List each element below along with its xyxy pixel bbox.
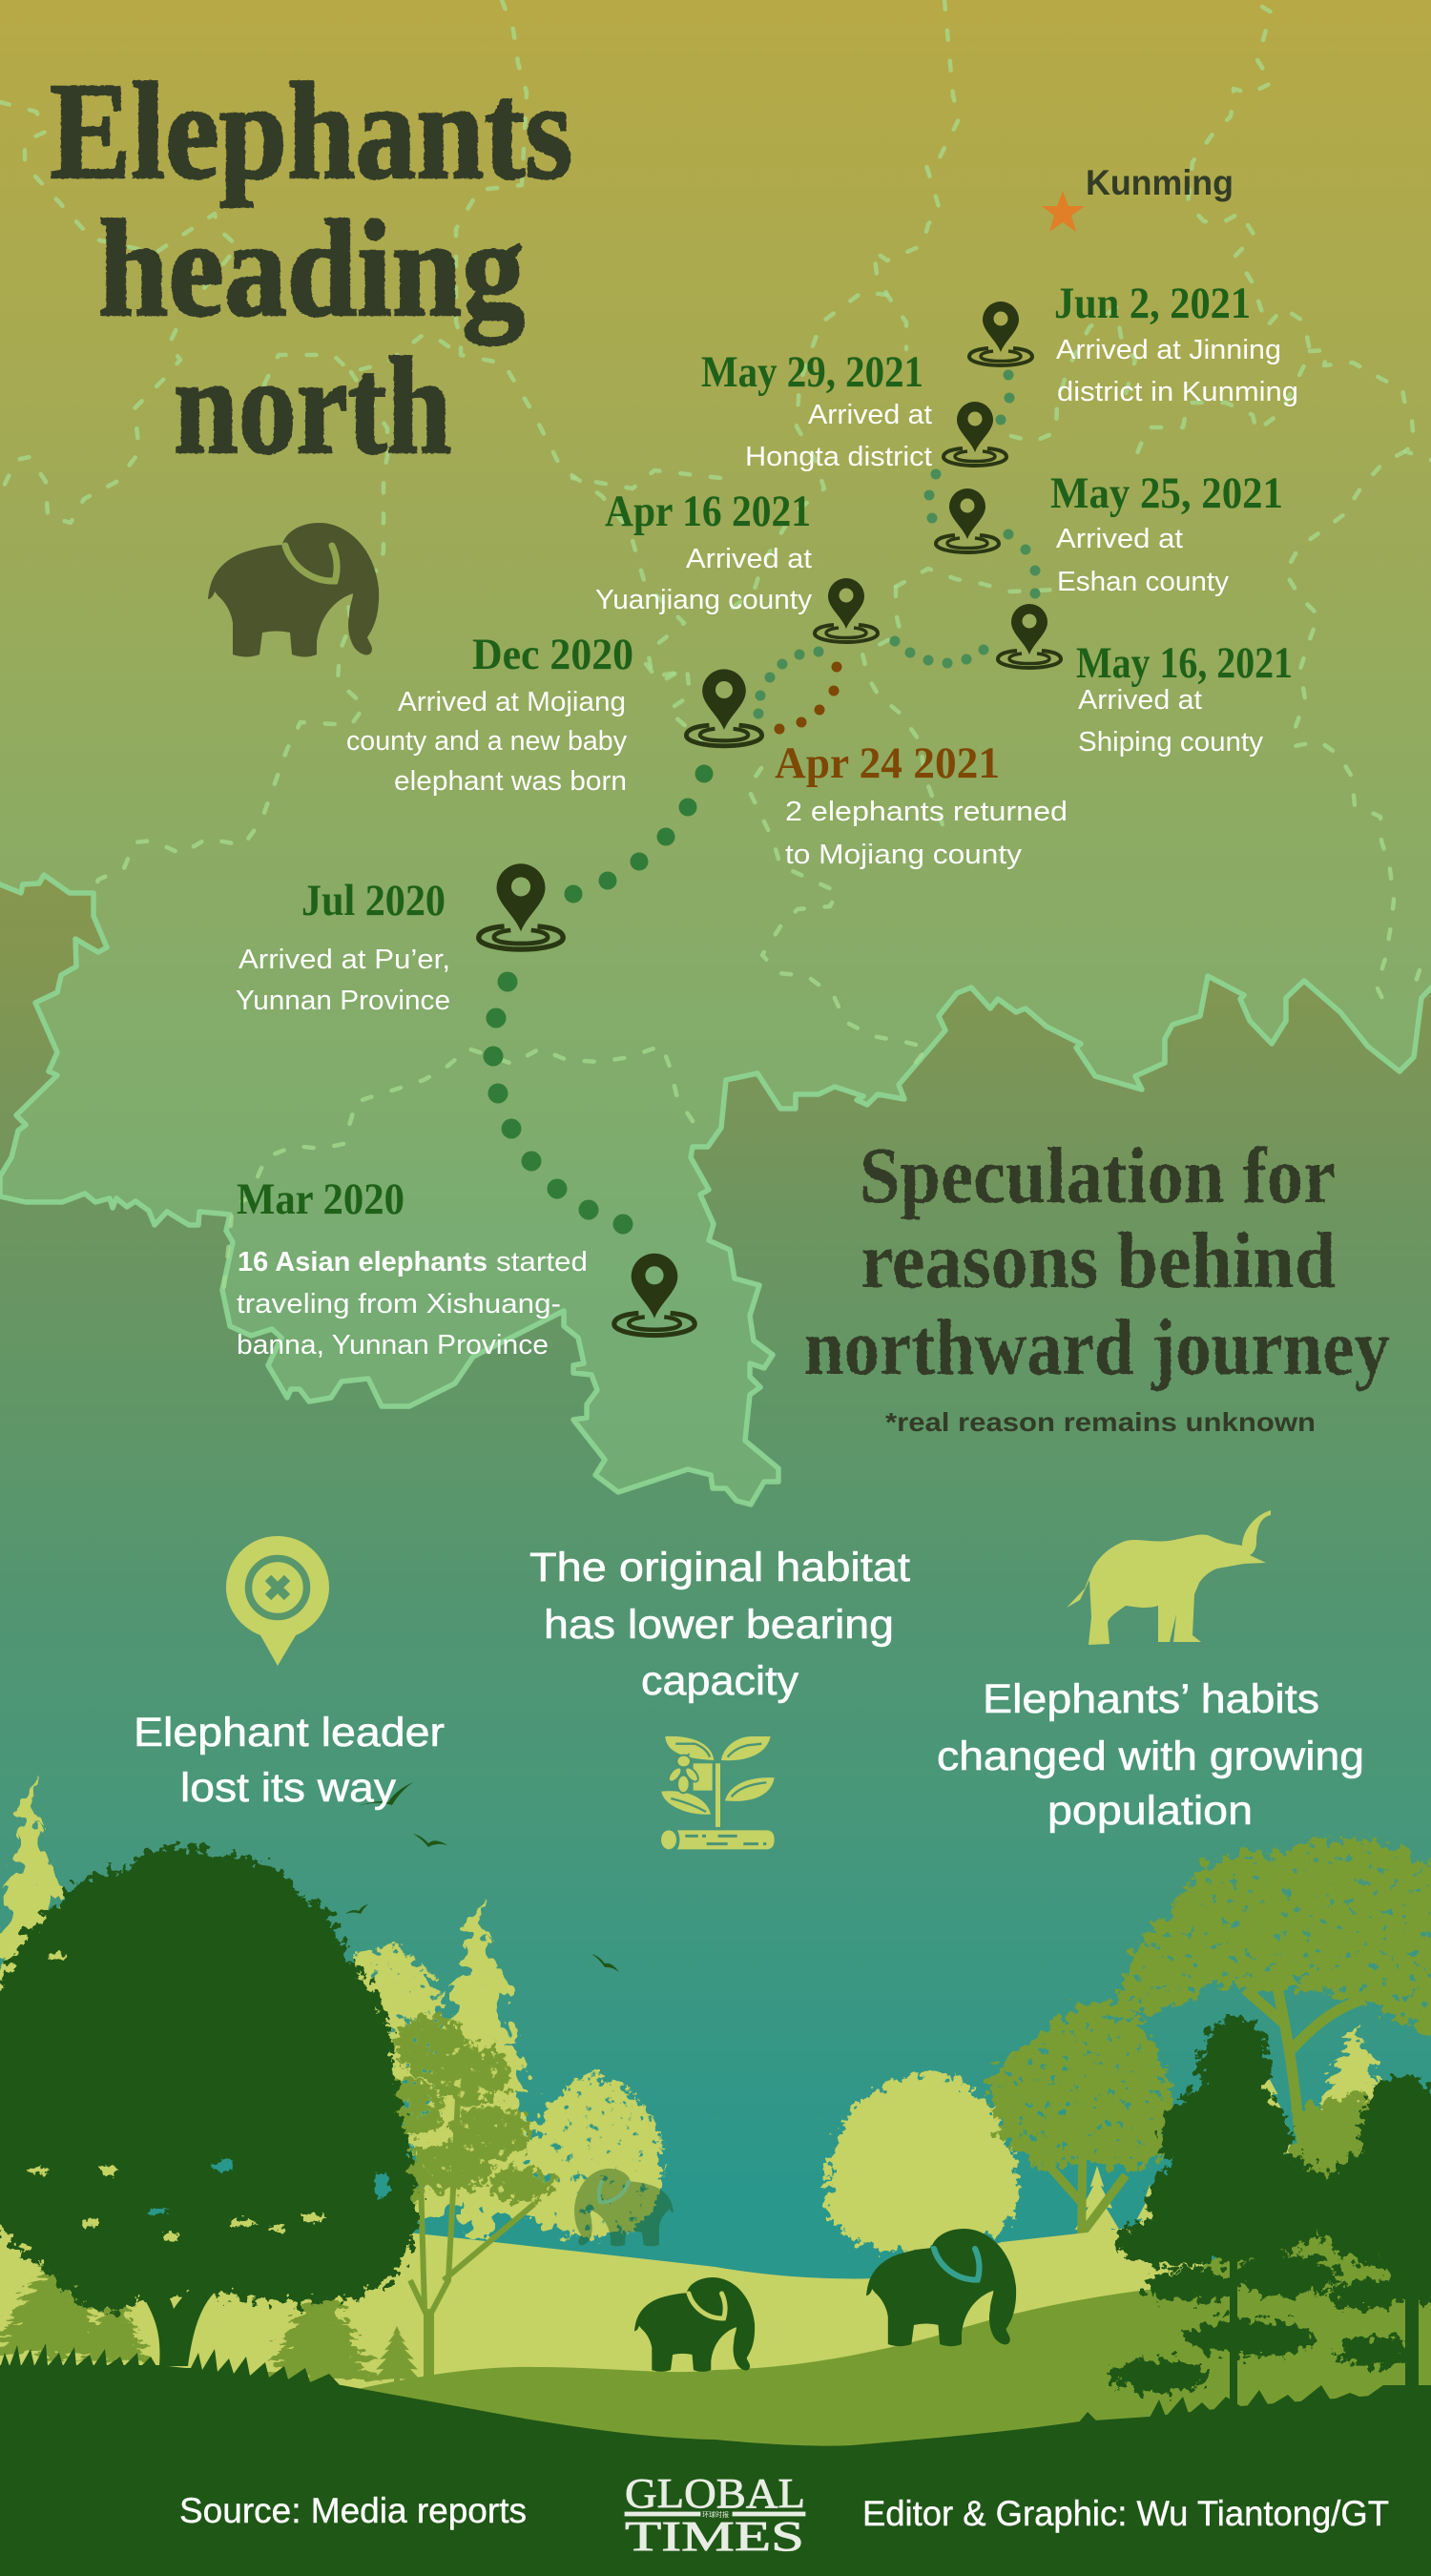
location pins <box>479 301 1061 1336</box>
note: real reason unknown: *real reason remains unknown <box>885 1407 1316 1437</box>
dark trees right <box>1111 2018 1431 2409</box>
title: Elephants <box>50 55 572 208</box>
reason 2: lower bearing capacity: capacity <box>641 1658 799 1704</box>
event: Apr 16 2021: Arrived at <box>686 544 812 574</box>
event: Apr 24 2021: Apr 24 2021 <box>775 738 1000 788</box>
pin: Eshan <box>936 488 999 552</box>
heading: speculation <box>804 1132 1390 1392</box>
pin: Jinning <box>969 301 1032 365</box>
medium hill <box>353 2156 1431 2481</box>
event: Mar 2020 <box>237 1174 588 1361</box>
acacia tree <box>1118 1839 1431 2132</box>
reason 3: habits changed: population <box>1047 1788 1253 1834</box>
elephant small foreground <box>634 2277 755 2372</box>
title <box>50 55 572 483</box>
event: May 16, 2021: Shiping county <box>1078 727 1264 758</box>
logo: Global Times: GLOBAL <box>625 2470 805 2517</box>
event: Jul 2020: Yunnan Province <box>236 986 450 1016</box>
event: Apr 24 2021 <box>775 738 1068 870</box>
light conifer middle <box>396 1897 558 2240</box>
large dots Dec 2020 to Jul 2020 <box>565 765 714 903</box>
olive bushes left <box>0 2256 421 2387</box>
light hill <box>0 2204 1240 2481</box>
logo: Global Times: 环球时报 <box>702 2510 729 2520</box>
event: May 29, 2021: May 29, 2021 <box>701 347 923 397</box>
event: Mar 2020: Mar 2020 <box>237 1174 404 1224</box>
icon: orange star <box>1042 191 1085 232</box>
olive tree centre <box>386 2014 555 2378</box>
event: May 25, 2021: Eshan county <box>1057 567 1230 597</box>
reason 2: lower bearing capacity: has lower bearing <box>544 1602 894 1648</box>
light conifer left <box>0 1773 106 2212</box>
event: Apr 16 2021: Apr 16 2021 <box>605 487 811 536</box>
reason 3: habits changed <box>937 1510 1364 1834</box>
reason 3: habits changed: changed with growing <box>937 1734 1364 1779</box>
map region with Yunnan boundary <box>0 0 1431 1505</box>
pin: Mojiang <box>686 669 762 746</box>
route dots <box>483 370 1040 1235</box>
event: May 29, 2021: Arrived at <box>808 400 932 430</box>
pin: Shiping <box>998 604 1061 668</box>
reason 3: habits changed: Elephants’ habits <box>983 1676 1319 1722</box>
event: May 25, 2021 <box>1050 468 1283 597</box>
grass left <box>0 2343 342 2387</box>
small light conifers <box>1009 2024 1411 2323</box>
light gaps in big tree <box>27 1952 326 2242</box>
dark tree two <box>1314 2075 1431 2395</box>
round light tree right <box>827 2075 1018 2252</box>
event: Jun 2, 2021: Arrived at Jinning <box>1056 335 1281 365</box>
footer credit: Editor & Graphic: Wu Tiantong/GT <box>862 2494 1389 2533</box>
event: Mar 2020: 16 Asian elephants <box>238 1247 487 1278</box>
olive tree middle right <box>986 2003 1177 2304</box>
light broad tree <box>329 1946 448 2147</box>
event: Mar 2020: banna, Yunnan Province <box>237 1330 549 1361</box>
event: Jun 2, 2021: Jun 2, 2021 <box>1054 279 1251 328</box>
event: May 25, 2021: Arrived at <box>1056 524 1183 554</box>
heading: speculation: Speculation for <box>860 1132 1336 1220</box>
background faint elephant <box>574 2169 674 2246</box>
event: Jul 2020: Arrived at Pu’er, <box>238 945 450 975</box>
event: Jun 2, 2021 <box>1054 279 1298 407</box>
brown return dots <box>775 662 841 735</box>
event: Jul 2020: Jul 2020 <box>301 876 446 925</box>
event: Mar 2020: traveling from Xishuang- <box>237 1289 561 1319</box>
event: Mar 2020: started <box>496 1247 588 1278</box>
round light tree behind bg elephant <box>528 2075 662 2237</box>
icon: plant, bee and log <box>661 1736 775 1849</box>
event: Apr 24 2021: to Mojiang county <box>785 840 1023 870</box>
reason 2: lower bearing capacity: The original habitat <box>529 1545 910 1590</box>
event: Dec 2020: county and a new baby <box>346 726 627 757</box>
grass right <box>1078 2385 1431 2428</box>
event: Apr 16 2021 <box>595 487 813 615</box>
birds <box>345 1782 619 1972</box>
logo: Global Times: TIMES <box>625 2513 804 2560</box>
event: Dec 2020: elephant was born <box>394 766 627 797</box>
county boundary dashed lines <box>0 0 1431 1293</box>
small dots 2021 route <box>754 370 1040 719</box>
pin: Pu'er <box>479 863 563 949</box>
footer source: Source: Media reports <box>179 2491 527 2530</box>
event: Apr 16 2021: Yuanjiang county <box>595 585 813 615</box>
big dark tree <box>0 1847 418 2366</box>
event: Dec 2020: Dec 2020 <box>472 630 633 679</box>
large dots Jul 2020 to Mar 2020 <box>483 971 633 1235</box>
elephant large foreground <box>866 2229 1016 2346</box>
dark tree one <box>1111 2018 1339 2409</box>
event: May 29, 2021 <box>701 347 932 472</box>
event: Dec 2020: Arrived at Mojiang <box>398 687 626 717</box>
ground <box>0 2365 1431 2576</box>
event: May 16, 2021: May 16, 2021 <box>1076 638 1293 688</box>
reason 2: lower bearing capacity <box>529 1545 910 1849</box>
event: May 16, 2021: Arrived at <box>1078 685 1202 716</box>
pin: Yuanjiang <box>815 578 878 642</box>
event: Jul 2020 <box>236 876 450 1016</box>
event: May 25, 2021: May 25, 2021 <box>1050 468 1283 518</box>
olive forest patch right <box>1269 2095 1431 2385</box>
event: Jun 2, 2021: district in Kunming <box>1057 377 1298 407</box>
reason 1: elephant leader lost its way: Elephant leader <box>134 1710 445 1755</box>
event: Apr 24 2021: 2 elephants returned <box>785 797 1068 827</box>
heading: speculation: reasons behind <box>861 1216 1336 1305</box>
icon: trumpeting elephant <box>1067 1510 1271 1645</box>
reason 1: elephant leader lost its way <box>134 1536 445 1811</box>
background trees: olive <box>986 1839 1431 2385</box>
title: north <box>174 330 451 483</box>
pin: Hongta <box>944 402 1006 466</box>
Kunming label with star <box>1042 163 1234 232</box>
logo: Global Times <box>625 2470 805 2560</box>
event: Dec 2020 <box>346 630 633 797</box>
event: May 29, 2021: Hongta district <box>745 442 932 472</box>
icon: map pin with X <box>226 1536 329 1666</box>
reason 1: elephant leader lost its way: lost its way <box>180 1765 397 1811</box>
event: May 16, 2021 <box>1076 638 1293 758</box>
city name: Kunming <box>1086 163 1234 202</box>
title: heading <box>98 193 525 345</box>
icon: elephant under title <box>208 523 379 656</box>
background trees: light <box>0 1773 1411 2323</box>
pin: Xishuangbanna <box>614 1254 695 1336</box>
